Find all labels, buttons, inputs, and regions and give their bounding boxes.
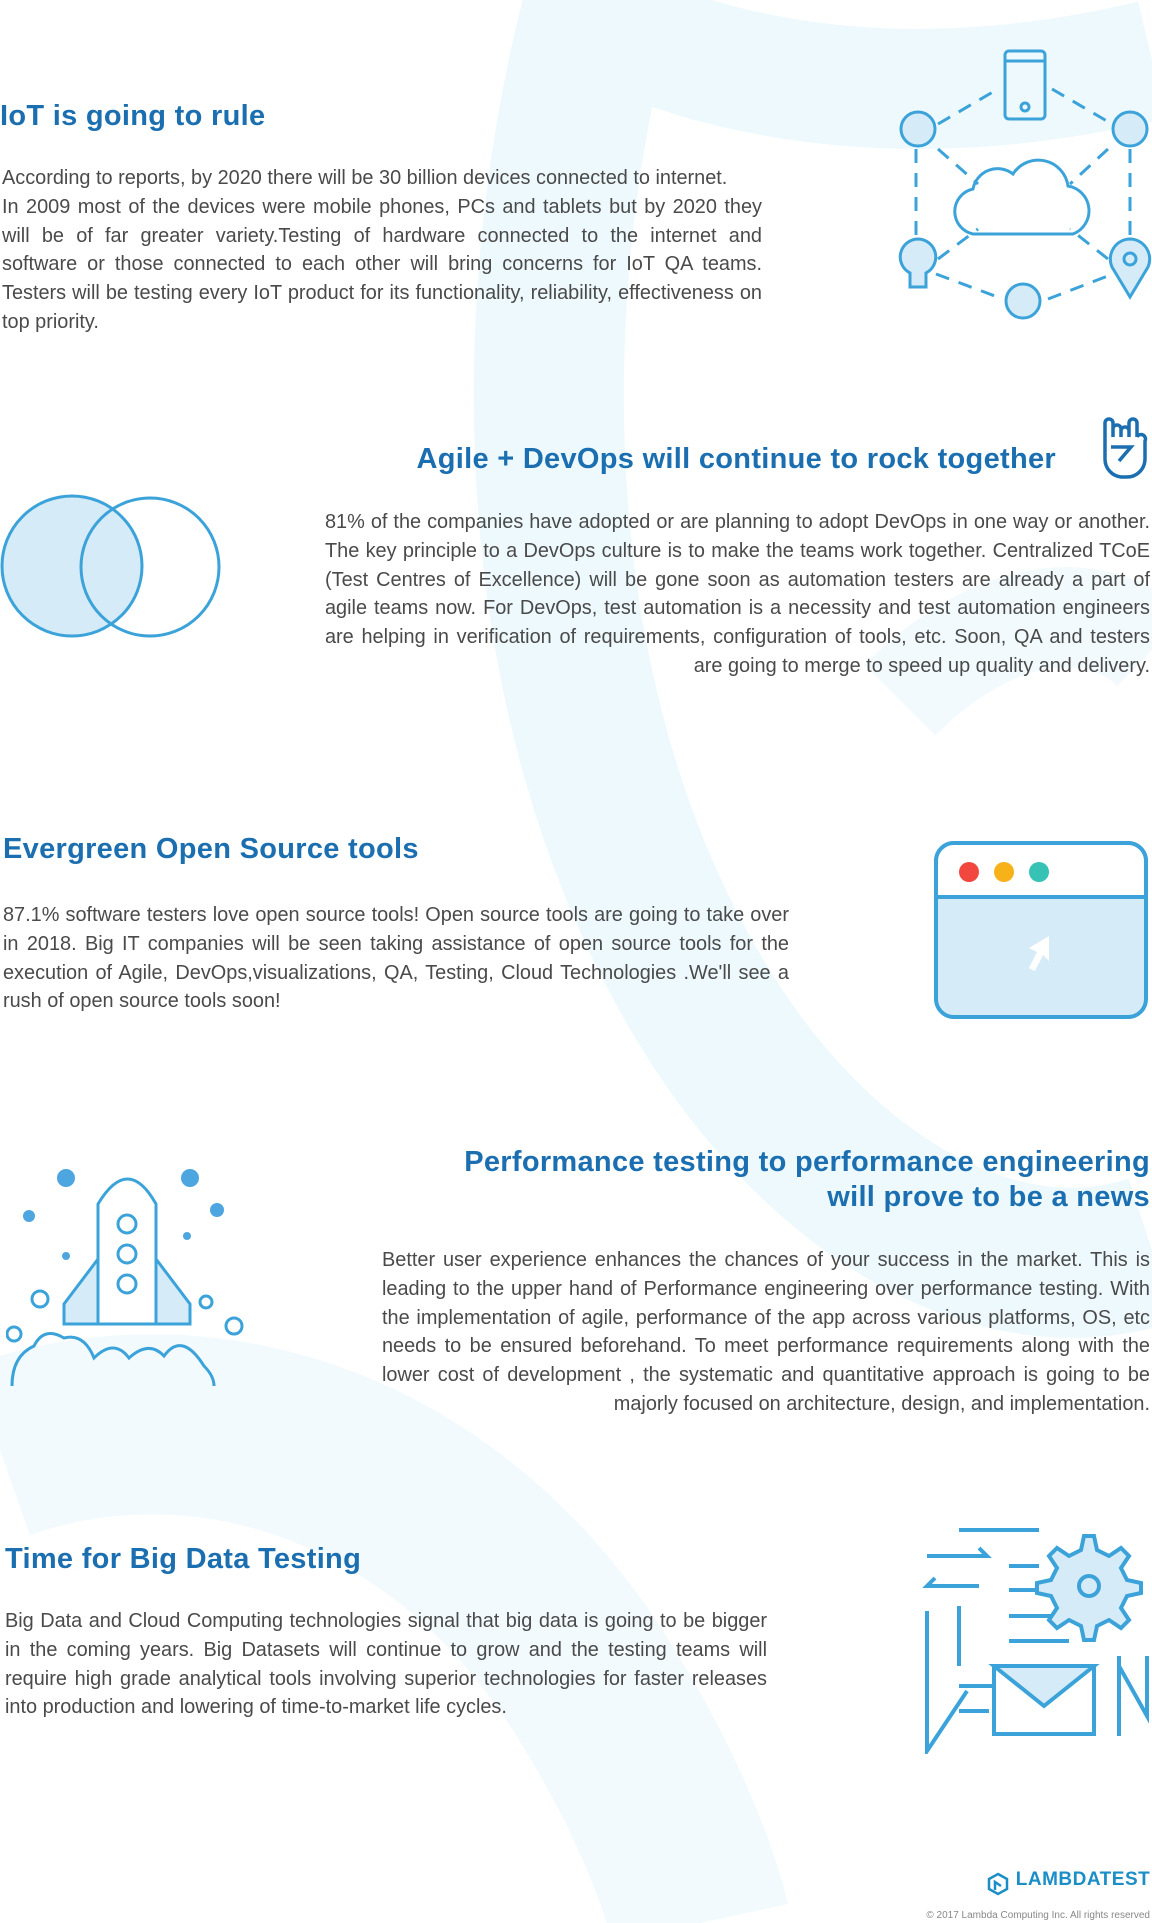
text: IoT body: According to reports, by 2020 there will be 30 billion devices connected to internet. [2, 167, 727, 189]
icon: IoT network [898, 50, 1152, 320]
text: performance body: Better user experience enhances the chances of your success in the market. This is leading to the upper hand of Performance engineering over performance testing. With the implementation of agile, performance of the app across various platforms, OS, etc needs to be ensured beforehand. To meet performance requirements along with the lower cost of development , the systematic and quantitative approach is going to be majorly focused on architecture, design, and implementation. [382, 1249, 1150, 1415]
icon: browser window [934, 841, 1148, 1019]
title: performance: will prove to be a news [827, 1181, 1150, 1213]
title: big data: Time for Big Data Testing [5, 1543, 361, 1575]
icon: rocket [6, 1169, 244, 1386]
title: open source: Evergreen Open Source tools [3, 833, 419, 865]
title: IoT: IoT is going to rule [0, 100, 265, 132]
venn diagram [0, 494, 220, 638]
logo: LambdaTest: LAMBDATEST [1016, 1869, 1150, 1890]
copyright: © 2017 Lambda Computing Inc. All rights reserved [926, 1910, 1150, 1921]
text: open source body: 87.1% software testers love open source tools! Open source tools are going to take over in 2018. Big IT companies will be seen taking assistance of open source tools for the execution of Agile, DevOps,visualizations, QA, Testing, Cloud Technologies .We'll see a rush of open source tools soon! [3, 904, 789, 1012]
title: performance: Performance testing to performance engineering [464, 1146, 1150, 1178]
text: IoT body: In 2009 most of the devices were mobile phones, PCs and tablets but by 2020 they will be of far greater variety.Testing of hardware connected to the internet and software or those connected to each other will bring concerns for IoT QA teams. Testers will be testing every IoT product for its functionality, reliability, effectiveness on top priority. [2, 196, 762, 333]
title: performance [464, 1146, 1150, 1213]
logo: LambdaTest [988, 1869, 1150, 1896]
title: Agile DevOps: Agile + DevOps will continue to rock together [416, 443, 1056, 475]
icon: data exchange [922, 1528, 1149, 1754]
text: DevOps body: 81% of the companies have adopted or are planning to adopt DevOps in one way or another. The key principle to a DevOps culture is to make the teams work together. Centralized TCoE (Test Centres of Excellence) will be gone soon as automation testers are already a part of agile teams now. For DevOps, test automation is a necessity and test automation engineers are helping in verification of requirements, configuration of tools, etc. Soon, QA and testers are going to merge to speed up quality and delivery. [325, 511, 1150, 677]
icon: rock hand [1103, 417, 1148, 479]
text: big data body: Big Data and Cloud Computing technologies signal that big data is going to be bigger in the coming years. Big Datasets will continue to grow and the testing teams will require high grade analytical tools involving superior technologies for faster releases into production and lowering of time-to-market life cycles. [5, 1610, 767, 1718]
